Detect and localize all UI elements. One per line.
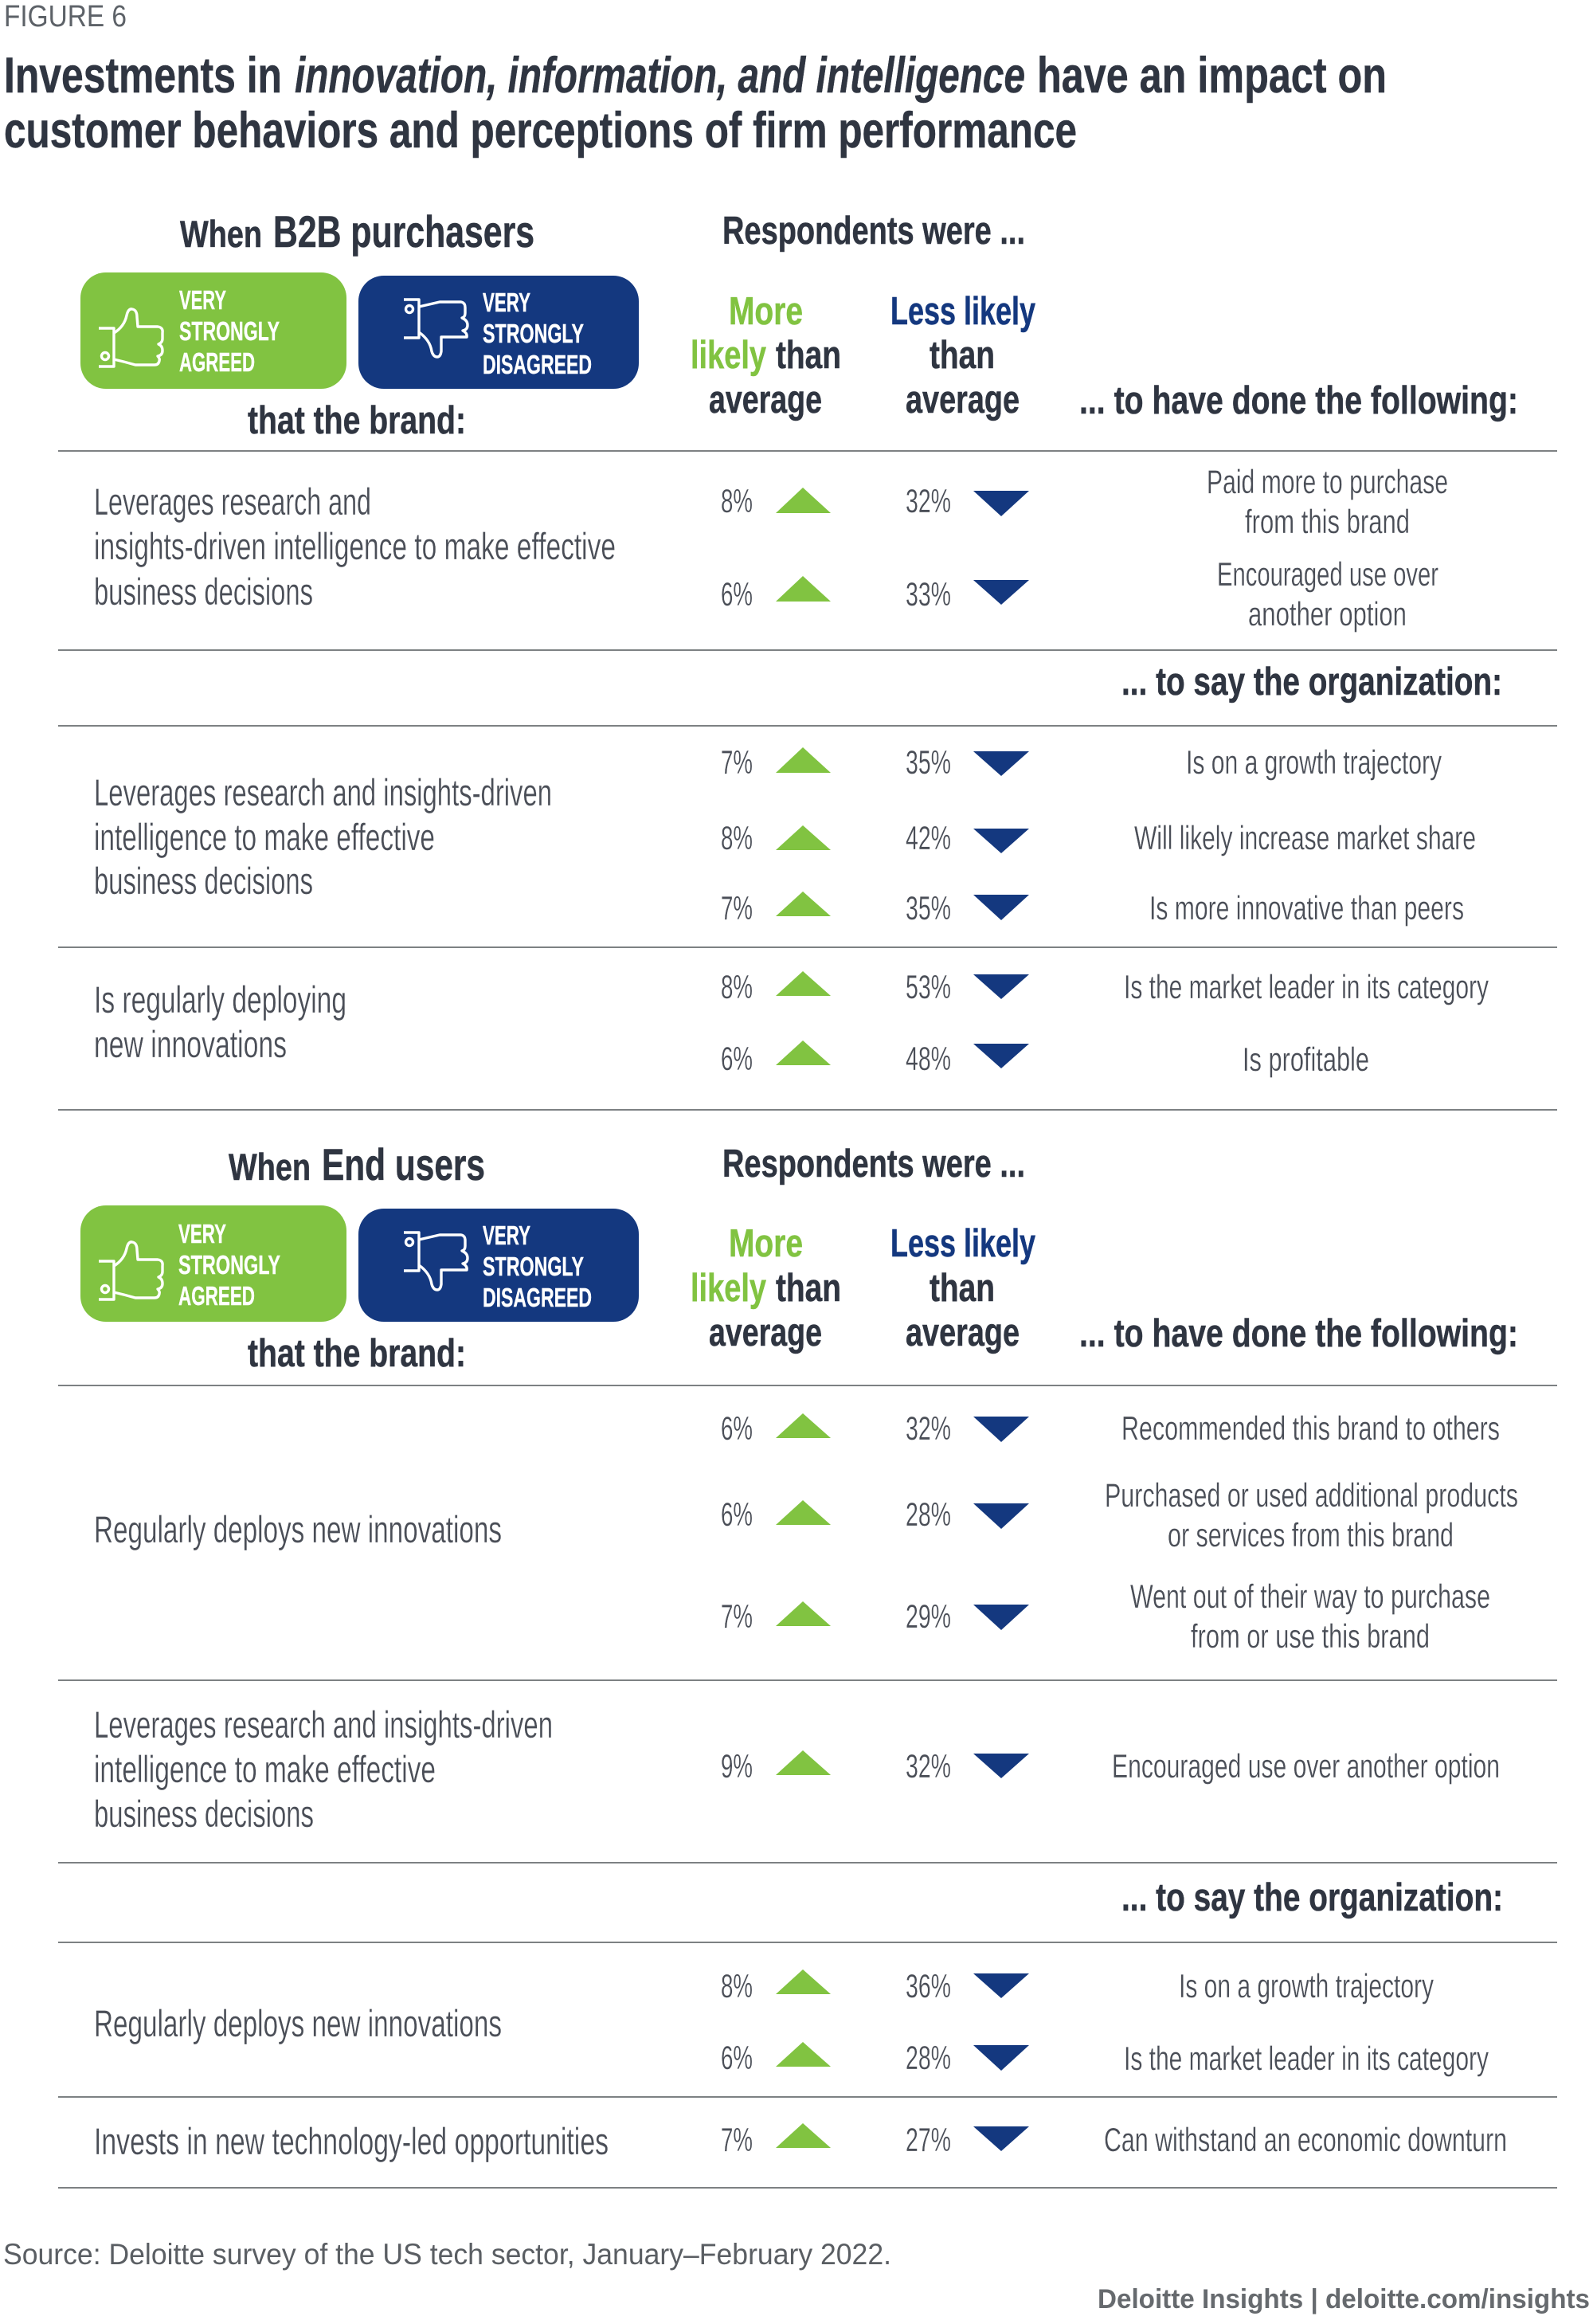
- row: regularly deploys (done): [94, 1409, 1518, 1655]
- outcome: purchased additional: [1105, 1476, 1518, 1554]
- value: more 8%: [721, 819, 831, 856]
- driver text: intelligence to make effective: [94, 816, 435, 858]
- value: more 6%: 6%: [721, 1040, 753, 1077]
- column header: more likely: More: [729, 1222, 803, 1265]
- panel: B2B purchasers: [58, 206, 1557, 1110]
- row: regularly deploys (say): [94, 1967, 1489, 2077]
- outcome: went out of their way: [1130, 1577, 1490, 1655]
- value: more 7%: [721, 743, 831, 781]
- value: less 33%: 33%: [906, 575, 951, 613]
- outcome: paid more: [1207, 463, 1448, 540]
- value: less 32%: [906, 482, 1029, 519]
- driver text: new innovations: [94, 1023, 287, 1065]
- driver text: [94, 480, 616, 613]
- value: more 6%: 6%: [721, 1495, 753, 1533]
- value: more 6%: 6%: [721, 2039, 753, 2076]
- column header: more likely: average: [709, 378, 822, 421]
- section heading: to say the organization: ... to say the organization:: [1121, 1876, 1503, 1919]
- value: more 8%: [721, 968, 831, 1005]
- driver text: Is regularly deploying: [94, 978, 346, 1021]
- outcome: profitable: Is profitable: [1243, 1041, 1369, 1078]
- driver text: business decisions: [94, 570, 313, 613]
- credit: Deloitte Insights | deloitte.com/insights: [1098, 2284, 1590, 2314]
- value: less 35%: [906, 743, 1029, 781]
- outcome: more innovative: Is more innovative than peers: [1149, 889, 1464, 927]
- value: less 28%: 28%: [906, 1495, 951, 1533]
- column header: less likely: Less likely: [890, 290, 1035, 333]
- driver text: business decisions: [94, 1793, 314, 1835]
- legend: very strongly disagreed: [358, 276, 639, 389]
- value: more 8%: [721, 1967, 831, 2005]
- row: regularly deploying: [94, 968, 1489, 1078]
- outcome: encouraged use: Encouraged use over: [1217, 555, 1438, 593]
- value: less 29%: 29%: [906, 1597, 951, 1635]
- column header: less likely: [890, 1222, 1035, 1354]
- icon: thumbs up: [99, 1242, 162, 1299]
- icon: thumbs down: [404, 300, 468, 357]
- column header: more likely: likely: [691, 334, 766, 377]
- value: less 29%: [906, 1597, 1029, 1635]
- driver text: [94, 771, 552, 902]
- heading: When End users: When: [229, 1146, 311, 1188]
- row: leverages research (done): [94, 463, 1448, 633]
- value: less 27%: 27%: [906, 2121, 951, 2158]
- legend: very strongly agreed: [80, 272, 346, 389]
- legend: very strongly disagreed: STRONGLY: [483, 1252, 584, 1281]
- value: more 8%: 8%: [721, 819, 753, 856]
- driver text: Leverages research and insights-driven: [94, 771, 552, 813]
- legend: very strongly disagreed: VERY: [483, 288, 530, 317]
- heading: respondents were: Respondents were ...: [722, 1142, 1025, 1186]
- figure label: FIGURE 6: [4, 0, 127, 33]
- subheading: that the brand: that the brand:: [248, 399, 466, 442]
- driver text: intelligence to make effective: [94, 1748, 436, 1790]
- value: less 35%: [906, 889, 1029, 927]
- value: more 8%: 8%: [721, 482, 753, 519]
- value: less 35%: 35%: [906, 743, 951, 781]
- section heading: to say the organization: ... to say the organization:: [1121, 660, 1502, 703]
- legend: very strongly agreed: VERY: [179, 285, 226, 315]
- value: less 35%: 35%: [906, 889, 951, 927]
- row: leverages research: [94, 1703, 1500, 1835]
- column header: more likely: likely: [691, 1267, 766, 1310]
- outcome: encouraged use: [1217, 555, 1438, 633]
- value: more 8%: 8%: [721, 968, 753, 1005]
- value: more 6%: 6%: [721, 1409, 753, 1447]
- value: less 48%: [906, 1040, 1029, 1077]
- outcome: paid more: from this brand: [1245, 503, 1410, 540]
- value: less 32%: [906, 1409, 1029, 1447]
- column header: less likely: average: [906, 378, 1020, 421]
- column header: less likely: average: [906, 1311, 1020, 1354]
- heading: When B2B purchasers: When: [180, 213, 262, 255]
- row: leverages research (say): [94, 743, 1476, 927]
- value: less 28%: 28%: [906, 2039, 951, 2076]
- title: have an impact on: [1037, 48, 1387, 104]
- title: customer behaviors and perceptions of firm performance: [4, 103, 1077, 159]
- value: more 7%: 7%: [721, 743, 753, 781]
- subheading: that the brand: that the brand:: [248, 1332, 466, 1375]
- heading: respondents were: Respondents were ...: [722, 210, 1025, 253]
- legend: very strongly disagreed: DISAGREED: [483, 1283, 592, 1312]
- value: more 6%: 6%: [721, 575, 753, 613]
- value: more 7%: [721, 1597, 831, 1635]
- outcome: went out of their way: from or use this brand: [1191, 1617, 1430, 1655]
- value: more 8%: 8%: [721, 1967, 753, 2005]
- panel: End users: [58, 1139, 1557, 2188]
- driver text: [94, 1703, 553, 1835]
- icon: thumbs down: [404, 1233, 468, 1290]
- title: Investments in: [4, 48, 282, 104]
- column header: less likely: than: [930, 334, 995, 377]
- value: less 28%: [906, 2039, 1029, 2076]
- legend: very strongly agreed: STRONGLY: [179, 316, 280, 346]
- legend: very strongly disagreed: STRONGLY: [483, 319, 584, 348]
- value: more 6%: [721, 1040, 831, 1077]
- value: less 27%: [906, 2121, 1029, 2158]
- legend: very strongly disagreed: [358, 1209, 639, 1322]
- column header: more likely: [691, 1222, 841, 1354]
- value: less 28%: [906, 1495, 1029, 1533]
- column header: more likely: than: [776, 334, 841, 377]
- outcome: growth trajectory: Is on a growth trajectory: [1179, 1967, 1434, 2005]
- driver text: Leverages research and: [94, 480, 371, 523]
- value: more 7%: 7%: [721, 1597, 753, 1635]
- column header: more likely: than: [776, 1267, 841, 1310]
- outcome: encouraged use: another option: [1248, 595, 1407, 633]
- heading: When B2B purchasers: [180, 206, 534, 257]
- value: less 36%: [906, 1967, 1029, 2005]
- value: more 9%: 9%: [721, 1747, 753, 1785]
- driver text: [94, 978, 346, 1065]
- value: less 33%: [906, 575, 1029, 613]
- value: more 9%: [721, 1747, 831, 1785]
- legend: very strongly agreed: STRONGLY: [178, 1250, 280, 1280]
- driver text: Regularly deploys new innovations: [94, 2002, 502, 2044]
- value: more 7%: 7%: [721, 2121, 753, 2158]
- outcome: purchased additional: or services from this brand: [1168, 1516, 1454, 1554]
- column header: less likely: than: [930, 1267, 995, 1310]
- driver text: business decisions: [94, 860, 313, 902]
- value: more 6%: [721, 2039, 831, 2076]
- value: less 32%: 32%: [906, 482, 951, 519]
- row: new technology: [94, 2120, 1507, 2162]
- value: less 36%: 36%: [906, 1967, 951, 2005]
- value: more 7%: 7%: [721, 889, 753, 927]
- legend: very strongly agreed: VERY: [178, 1219, 226, 1248]
- value: more 6%: [721, 575, 831, 613]
- column header: more likely: average: [709, 1311, 822, 1354]
- value: less 42%: [906, 819, 1029, 856]
- value: more 7%: [721, 889, 831, 927]
- outcome: growth trajectory: Is on a growth trajectory: [1186, 743, 1442, 781]
- value: more 7%: [721, 2121, 831, 2158]
- title: innovation, information, and intelligence: [295, 48, 1025, 104]
- value: less 53%: 53%: [906, 968, 951, 1005]
- outcome: paid more: Paid more to purchase: [1207, 463, 1448, 500]
- legend: very strongly disagreed: VERY: [483, 1221, 530, 1250]
- column header: less likely: [890, 290, 1035, 421]
- column header: more likely: [691, 290, 841, 421]
- value: less 48%: 48%: [906, 1040, 951, 1077]
- icon: thumbs up: [99, 309, 162, 366]
- column header: more likely: More: [729, 290, 803, 333]
- value: less 53%: [906, 968, 1029, 1005]
- value: more 6%: [721, 1409, 831, 1447]
- source note: Source: Deloitte survey of the US tech sector, January–February 2022.: [3, 2238, 891, 2271]
- heading: When B2B purchasers: B2B purchasers: [273, 206, 534, 257]
- legend: very strongly agreed: AGREED: [179, 347, 255, 377]
- driver text: Regularly deploys new innovations: [94, 1508, 502, 1550]
- heading: When End users: [229, 1139, 485, 1189]
- driver text: Leverages research and insights-driven: [94, 1703, 553, 1746]
- value: more 6%: [721, 1495, 831, 1533]
- driver text: insights-driven intelligence to make effective: [94, 525, 616, 567]
- legend: very strongly agreed: AGREED: [178, 1281, 255, 1311]
- column header: less likely: Less likely: [890, 1222, 1035, 1265]
- value: less 32%: 32%: [906, 1747, 951, 1785]
- legend: very strongly disagreed: DISAGREED: [483, 350, 592, 379]
- heading: When End users: End users: [322, 1139, 485, 1189]
- value: less 42%: 42%: [906, 819, 951, 856]
- value: less 32%: [906, 1747, 1029, 1785]
- value: less 32%: 32%: [906, 1409, 951, 1447]
- title: [4, 48, 1387, 159]
- driver text: Invests in new technology-led opportunities: [94, 2120, 609, 2162]
- legend: very strongly agreed: [80, 1205, 346, 1322]
- value: more 8%: [721, 482, 831, 519]
